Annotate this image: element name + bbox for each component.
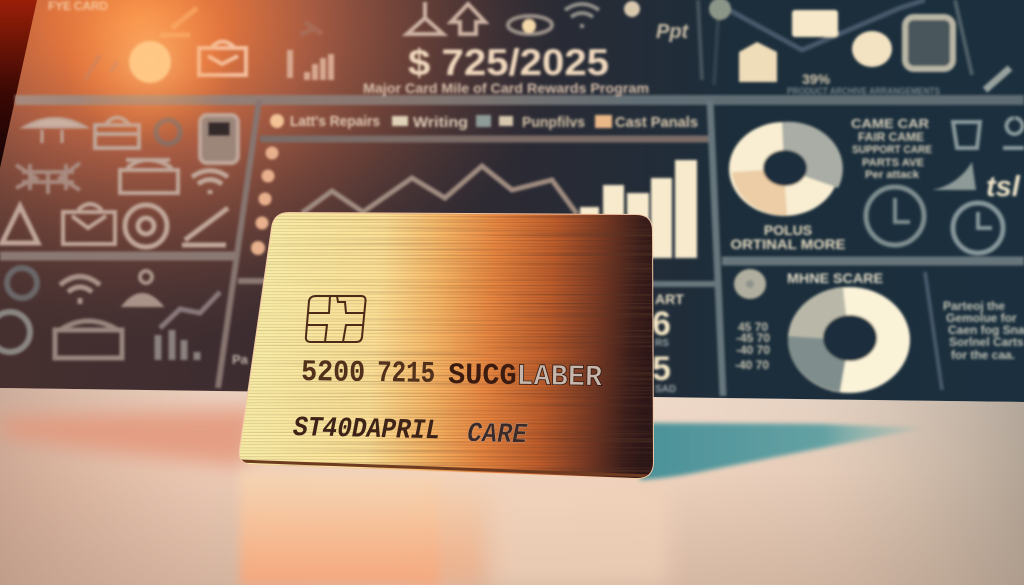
icon: shoe (932, 162, 976, 190)
panel dividers (0, 0, 1024, 396)
reflection fade (420, 476, 490, 585)
line chart (302, 166, 577, 214)
headline subtitle: Major Card Mile of Card Rewards Program (363, 80, 649, 96)
legend label three: Punpfilvs (522, 114, 585, 131)
small caption: PRODUCT ARCHIVE ARRANGEMENTS (787, 86, 940, 96)
logo text: tsl (986, 171, 1021, 203)
value list: -45 70 (736, 331, 770, 345)
icon: coin (129, 41, 171, 83)
card number: SUCGLABER (448, 359, 602, 395)
icon: globe (0, 312, 30, 352)
top-left icons (85, 8, 331, 83)
icon: pin and base (125, 295, 160, 305)
legend swatch four (499, 116, 513, 126)
icon: pie hands (978, 212, 992, 228)
icon: pie clock (953, 203, 1003, 253)
icon: trend (160, 8, 197, 35)
top-right icons (739, 10, 1010, 90)
icon: cup (953, 122, 980, 148)
side text block: Per attack (865, 169, 920, 181)
notes text block: Sorlnel Carts (949, 335, 1024, 349)
panel: small stats: SAD (655, 384, 676, 395)
icon: briefcase (95, 118, 139, 148)
notes text block: Gemolue for (946, 311, 1017, 325)
legend label one: Latt's Repairs (290, 113, 380, 130)
icon: dot two (709, 0, 731, 20)
value list: -40 70 (736, 343, 770, 357)
side text block: CAME CAR (851, 116, 930, 131)
icon: wifi (565, 4, 599, 28)
pale band beside reflection (490, 482, 670, 585)
icon: phone screen (208, 122, 230, 136)
icon: pin head (140, 271, 152, 283)
card rim (240, 213, 653, 478)
cardholder name: ST40DAPRIL (293, 413, 440, 447)
donut chart upper (729, 122, 843, 216)
legend label four: Cast Panals (615, 114, 698, 131)
donut chart lower (788, 287, 910, 393)
card number: 7215 (377, 357, 435, 392)
icon: calculator (905, 17, 953, 69)
cardholder name (293, 413, 529, 451)
headline figure: $ 725/2025 (408, 42, 609, 83)
icon: clock (866, 187, 924, 245)
icon: clipboard (739, 42, 777, 82)
value list: -40 70 (735, 358, 769, 372)
donut caption second line: ORTINAL MORE (730, 236, 846, 252)
top centre icons (407, 0, 731, 34)
icon: chip (306, 296, 366, 342)
icon: wings (16, 163, 80, 194)
legend dot (270, 114, 284, 128)
chart: dots, line and bars (251, 146, 697, 258)
percentage note: 39% (802, 71, 831, 87)
icon: ring (7, 268, 37, 298)
panel: small stats: 6 (652, 305, 671, 343)
notes text block: for the caa. (951, 348, 1015, 362)
tabletop (0, 388, 1024, 585)
notes text block (943, 299, 1024, 362)
axis dots (251, 146, 278, 255)
cardholder name: CARE (467, 419, 529, 451)
blurred infographic wall (0, 0, 1024, 396)
panel heading: MHNE SCARE (787, 270, 883, 286)
left icon panel (2, 115, 238, 247)
value list (735, 320, 770, 372)
teal card shadow (640, 423, 925, 480)
small note: Ppt (656, 21, 690, 43)
notes text block: Parteoj the (943, 299, 1005, 313)
icon: wifi (192, 170, 228, 194)
icon: umbrella (25, 118, 85, 143)
icon: pin (1003, 118, 1024, 148)
value list: 45 70 (738, 320, 768, 334)
icon: bars (290, 50, 331, 80)
icon: small chart (85, 55, 118, 80)
icon: warning triangle (2, 206, 38, 243)
panel: small stats: 5 (652, 350, 671, 388)
icon: clock (852, 31, 892, 67)
side text block: FAIR CAME (858, 130, 924, 144)
icon: dot (624, 1, 640, 17)
legend (270, 113, 698, 131)
legend swatch three (476, 115, 491, 127)
icon: pen (182, 208, 228, 245)
icon: small wheel (156, 120, 180, 144)
icon: bars (158, 330, 197, 360)
icon: envelope (792, 10, 838, 37)
panel: small stats (652, 291, 684, 395)
donut caption: POLUS (764, 222, 812, 238)
card face (230, 205, 660, 485)
panel: small stats: RS (655, 338, 669, 349)
icon: briefcase (199, 42, 246, 75)
lower-left icon panel (0, 268, 220, 360)
icon: printer (120, 160, 178, 193)
icon: car (55, 321, 122, 358)
card number: 5200 (301, 356, 365, 391)
panel: small stats: ART (655, 291, 684, 307)
right icons (866, 118, 1024, 253)
icon: flower badge (734, 269, 766, 299)
card number (301, 356, 602, 395)
icon: eye (508, 16, 552, 34)
icon: hat (407, 2, 443, 34)
icon: phone (200, 115, 238, 163)
side text block: SUPPORT CARE (852, 144, 932, 156)
icon: wifi (60, 276, 100, 304)
cropped label behind card: Pa (232, 352, 249, 367)
icon: wheel hub (138, 218, 154, 234)
left shadow on table (0, 408, 260, 466)
side text block (851, 116, 932, 181)
side text block: PARTS AVE (862, 157, 924, 169)
legend swatch five (595, 115, 612, 128)
overlay: warm light bloom (0, 0, 300, 180)
icon: wheel (125, 205, 167, 247)
legend swatch two (392, 116, 408, 126)
icon: clock hands (895, 198, 910, 222)
credit card (230, 205, 660, 485)
icon: envelope case (63, 204, 115, 244)
icon: eye pupil (522, 19, 536, 33)
background wall (0, 0, 1024, 410)
card reflection (240, 470, 440, 585)
icon: pen (985, 68, 1010, 90)
icon: arrow up (451, 4, 485, 34)
bar chart (580, 160, 697, 258)
icon: trend arrow (160, 292, 220, 328)
legend label two: Writing (413, 114, 468, 131)
icon: mark (300, 22, 322, 35)
